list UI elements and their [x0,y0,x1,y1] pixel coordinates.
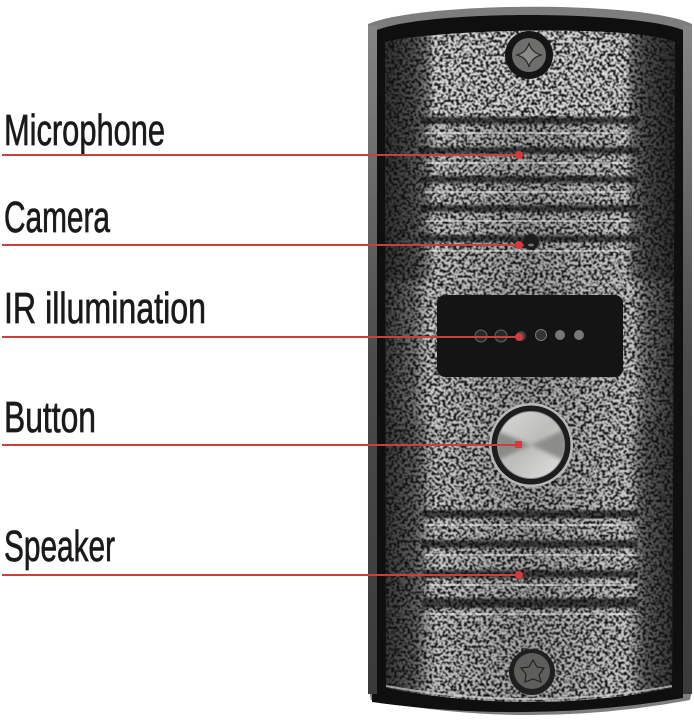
icon: call button [489,403,573,487]
callout: Microphone [2,106,523,159]
panel: textured metal faceplate [385,15,675,720]
camera lens [523,234,539,250]
speaker slats [422,510,638,608]
callout: Speaker [2,522,523,579]
slat highlights [425,132,637,615]
bottom edge highlight [386,686,672,699]
dark upper side zones [385,30,431,280]
callout: Speaker: Speaker [4,522,115,571]
raised top plate [431,28,629,116]
callout: Camera [2,193,523,249]
IR LEDs [475,330,584,342]
callout: Microphone: Microphone [4,106,165,155]
icon: top screw [505,31,553,79]
callout: Button: Button [4,393,96,442]
callout: Camera: Camera [4,193,110,242]
panel: IR illumination window [437,295,623,377]
microphone slats [420,117,638,242]
callout: IR illumination: IR illumination [4,284,206,333]
icon: bottom screw [509,649,555,695]
speckle texture [385,15,675,720]
callout: Button [2,393,522,448]
callout: IR illumination [2,284,523,341]
housing: outer frame [368,7,692,715]
